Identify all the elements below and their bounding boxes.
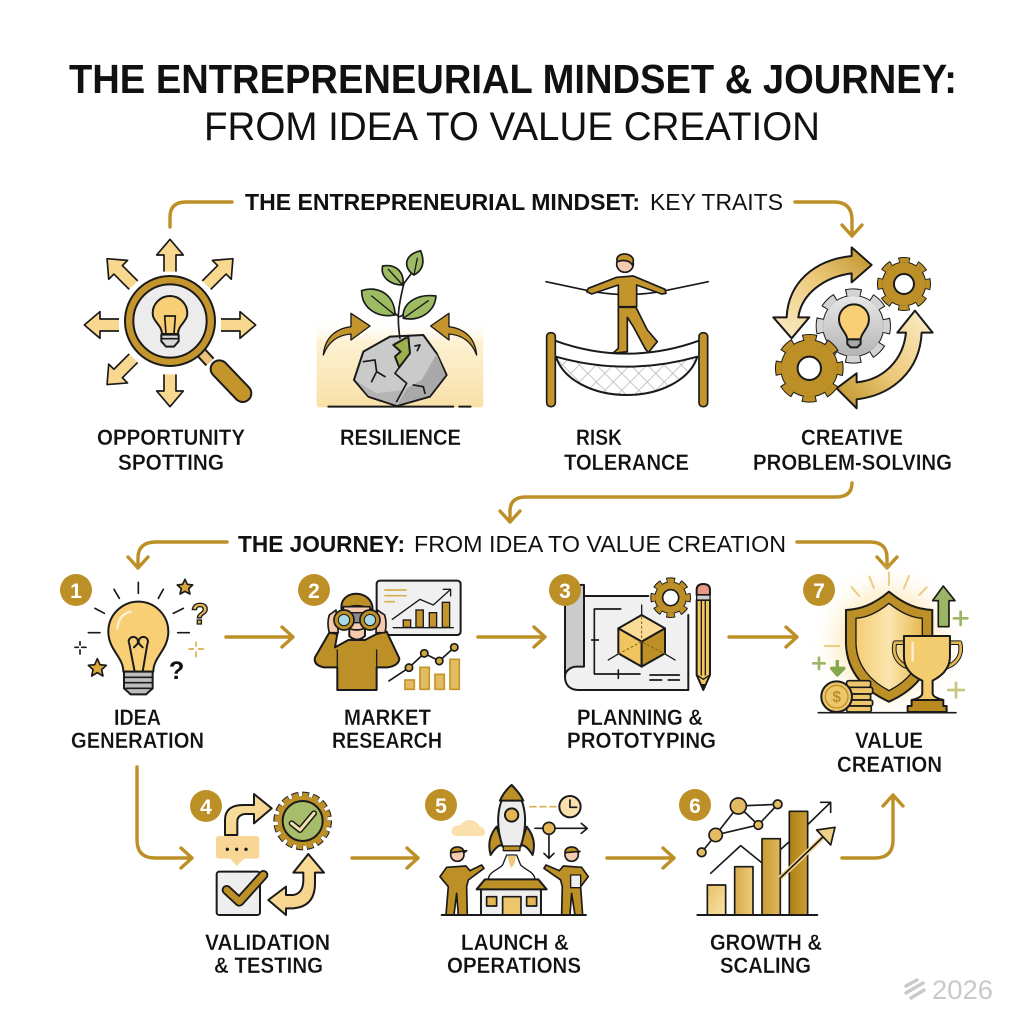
badge: step 2 <box>298 574 330 606</box>
badge: step 5: 5 <box>435 795 447 818</box>
label: value creation: VALUE <box>855 728 923 753</box>
label: risk tolerance: RISK <box>576 425 622 450</box>
label: value creation <box>837 728 942 777</box>
badge: step 6 <box>679 789 711 821</box>
label: opportunity spotting: OPPORTUNITY <box>97 425 245 450</box>
label: growth and scaling <box>710 930 822 978</box>
icon: opportunity spotting <box>84 239 256 407</box>
icon: value creation <box>808 562 968 722</box>
label: validation and testing <box>205 930 330 978</box>
label: creative problem-solving <box>753 425 952 475</box>
question marks: ? <box>191 598 209 631</box>
arrow: traits to journey <box>500 483 852 522</box>
label: market research <box>332 705 442 753</box>
label: opportunity spotting: SPOTTING <box>118 450 224 475</box>
arrow: step 1 to step 2 <box>226 627 293 647</box>
icon: growth and scaling <box>697 798 835 915</box>
label: validation and testing: & TESTING <box>214 953 323 978</box>
icon: risk tolerance <box>546 254 708 407</box>
label: launch and operations: OPERATIONS <box>447 953 581 978</box>
title: THE ENTREPRENEURIAL MINDSET & JOURNEY: <box>69 56 957 102</box>
label: idea generation: IDEA <box>114 705 161 730</box>
badge: step 3: 3 <box>559 580 571 603</box>
icon: resilience <box>317 251 483 407</box>
heading: the journey: THE JOURNEY: <box>238 531 405 557</box>
arrow: mindset heading to first trait <box>170 202 232 227</box>
label: idea generation: GENERATION <box>71 728 204 753</box>
icon: value creation: $ <box>832 689 841 706</box>
label: market research: RESEARCH <box>332 728 442 753</box>
badge: step 7 <box>803 574 835 606</box>
arrow: step 5 to step 6 <box>607 848 674 868</box>
title: FROM IDEA TO VALUE CREATION <box>204 105 820 149</box>
badge: step 1: 1 <box>70 580 82 603</box>
label: launch and operations: LAUNCH & <box>461 930 569 955</box>
label: resilience: RESILIENCE <box>340 425 461 450</box>
arrow: step 1 down to step 4 <box>137 767 192 868</box>
watermark <box>906 975 993 1005</box>
title <box>69 56 957 149</box>
label: growth and scaling: GROWTH & <box>710 930 822 955</box>
label: creative problem-solving: CREATIVE <box>801 425 903 450</box>
icon: validation and testing <box>216 794 329 915</box>
label: planning and prototyping: PROTOTYPING <box>567 728 716 753</box>
heading: the journey: FROM IDEA TO VALUE CREATION <box>414 531 786 557</box>
question marks <box>169 598 209 685</box>
label: validation and testing: VALIDATION <box>205 930 330 955</box>
label: planning and prototyping <box>567 705 716 753</box>
label: idea generation <box>71 705 204 753</box>
label: market research: MARKET <box>344 705 432 730</box>
label: value creation: CREATION <box>837 752 942 777</box>
badge: step 4 <box>190 790 222 822</box>
arrow: step 4 to step 5 <box>352 848 418 868</box>
watermark: 2026 <box>932 975 993 1005</box>
label: risk tolerance: TOLERANCE <box>564 450 689 475</box>
question marks: ? <box>169 657 184 685</box>
icon: creative problem-solving <box>773 247 933 408</box>
heading: key traits: THE ENTREPRENEURIAL MINDSET: <box>245 189 640 215</box>
badge: step 5 <box>425 789 457 821</box>
arrow: step 3 to step 7 <box>729 627 797 647</box>
label: launch and operations <box>447 930 581 978</box>
icon: planning and prototyping <box>565 580 710 690</box>
badge: step 1 <box>60 574 92 606</box>
arrow: step 6 up to step 7 <box>842 795 903 858</box>
heading: key traits: KEY TRAITS <box>650 189 783 215</box>
arrow: step 2 to step 3 <box>478 627 545 647</box>
badge: step 3 <box>549 574 581 606</box>
label: planning and prototyping: PLANNING & <box>577 705 703 730</box>
icon: idea generation <box>75 579 209 694</box>
icon: market research <box>315 581 461 690</box>
badge: step 2: 2 <box>308 580 320 603</box>
label: growth and scaling: SCALING <box>720 953 811 978</box>
arrow: journey heading to step 1 <box>128 542 227 568</box>
badge: step 4: 4 <box>200 796 212 819</box>
arrow: journey heading to step 7 <box>797 542 897 568</box>
label: opportunity spotting <box>97 425 245 475</box>
badge: step 6: 6 <box>689 795 701 818</box>
badge: step 7: 7 <box>813 580 825 603</box>
heading: the journey <box>238 531 786 557</box>
icon: launch and operations <box>440 785 588 915</box>
arrow: mindset heading to last trait <box>795 202 862 236</box>
label: risk tolerance <box>564 425 689 475</box>
label: creative problem-solving: PROBLEM-SOLVING <box>753 450 952 475</box>
